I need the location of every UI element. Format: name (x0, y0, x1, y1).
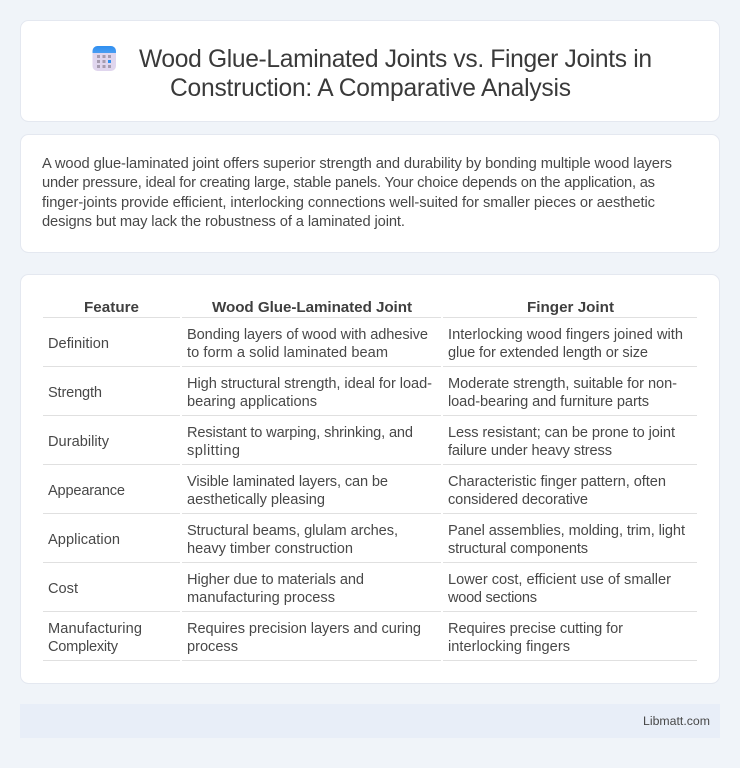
row: application: Structural beams, glulam arches, (187, 523, 398, 539)
row: appearance: Visible laminated layers, can be (187, 474, 388, 490)
row: definition (43, 327, 697, 367)
row: manufacturing complexity: process (187, 639, 238, 655)
row: application: heavy timber construction (187, 541, 353, 557)
row: durability: Less resistant; can be prone to joint (448, 425, 675, 441)
icon: calendar (92, 46, 116, 71)
row: manufacturing complexity: Requires precision layers and curing (187, 621, 421, 637)
title: Wood Glue-Laminated Joints vs. Finger Joints in (139, 46, 652, 73)
row: durability: splitting (187, 443, 240, 459)
row: application: Panel assemblies, molding, trim, light (448, 523, 685, 539)
row: application: Application (48, 532, 120, 548)
row: durability: Resistant to warping, shrinking, and (187, 425, 413, 441)
table header: Wood Glue-Laminated Joint (212, 299, 412, 316)
table header: Feature (84, 299, 139, 316)
row: application: structural components (448, 541, 588, 557)
summary text: designs but may lack the robustness of a laminated joint. (42, 214, 405, 230)
row: manufacturing complexity: Manufacturing (48, 621, 142, 637)
row: durability: Durability (48, 434, 110, 450)
row: definition: to form a solid laminated beam (187, 345, 388, 361)
row: cost: Higher due to materials and (187, 572, 364, 588)
row: definition: Bonding layers of wood with adhesive (187, 327, 428, 343)
summary text: under pressure, ideal for creating large, stable panels. Your choice depends on the application, as (42, 175, 655, 191)
title: Construction: A Comparative Analysis (170, 75, 571, 102)
panel: comparison table (20, 274, 720, 684)
row: manufacturing complexity: Complexity (48, 639, 119, 655)
row: definition: Interlocking wood fingers joined with (448, 327, 683, 343)
summary text: finger-joints provide efficient, interlocking connections well-suited for smaller pieces or aesthetic (42, 195, 655, 211)
row: manufacturing complexity: interlocking fingers (448, 639, 570, 655)
summary text: A wood glue-laminated joint offers superior strength and durability by bonding multiple wood layers (42, 156, 672, 172)
row: appearance: considered decorative (448, 492, 588, 508)
row: cost: wood sections (447, 590, 537, 606)
table header (43, 299, 697, 318)
title (139, 46, 652, 102)
row: cost (43, 572, 697, 612)
row: strength: Moderate strength, suitable for non- (448, 376, 677, 392)
row: strength: High structural strength, ideal for load- (187, 376, 432, 392)
summary text (42, 156, 672, 230)
row: cost: Cost (48, 581, 78, 597)
row: durability: failure under heavy stress (448, 443, 612, 459)
row: definition: glue for extended length or size (448, 345, 648, 361)
panel: summary (20, 134, 720, 252)
row: strength: load-bearing and furniture parts (448, 394, 649, 410)
row: strength: bearing applications (187, 394, 317, 410)
row: appearance (43, 474, 697, 514)
row: strength: Strength (48, 385, 102, 401)
row: manufacturing complexity: Requires precise cutting for (448, 621, 623, 637)
row: application (43, 523, 697, 563)
row: cost: Lower cost, efficient use of smaller (448, 572, 671, 588)
row: durability (43, 425, 697, 465)
row: appearance: Appearance (48, 483, 125, 499)
row: definition: Definition (48, 336, 109, 352)
row: manufacturing complexity (43, 621, 697, 661)
footer (20, 704, 720, 738)
panel: title card (20, 20, 720, 122)
row: appearance: Characteristic finger pattern, often (448, 474, 666, 490)
table header: Finger Joint (527, 299, 614, 316)
row: strength (43, 376, 697, 416)
footer: Libmatt.com (643, 714, 710, 728)
row: appearance: aesthetically pleasing (187, 492, 325, 508)
row: cost: manufacturing process (187, 590, 335, 606)
